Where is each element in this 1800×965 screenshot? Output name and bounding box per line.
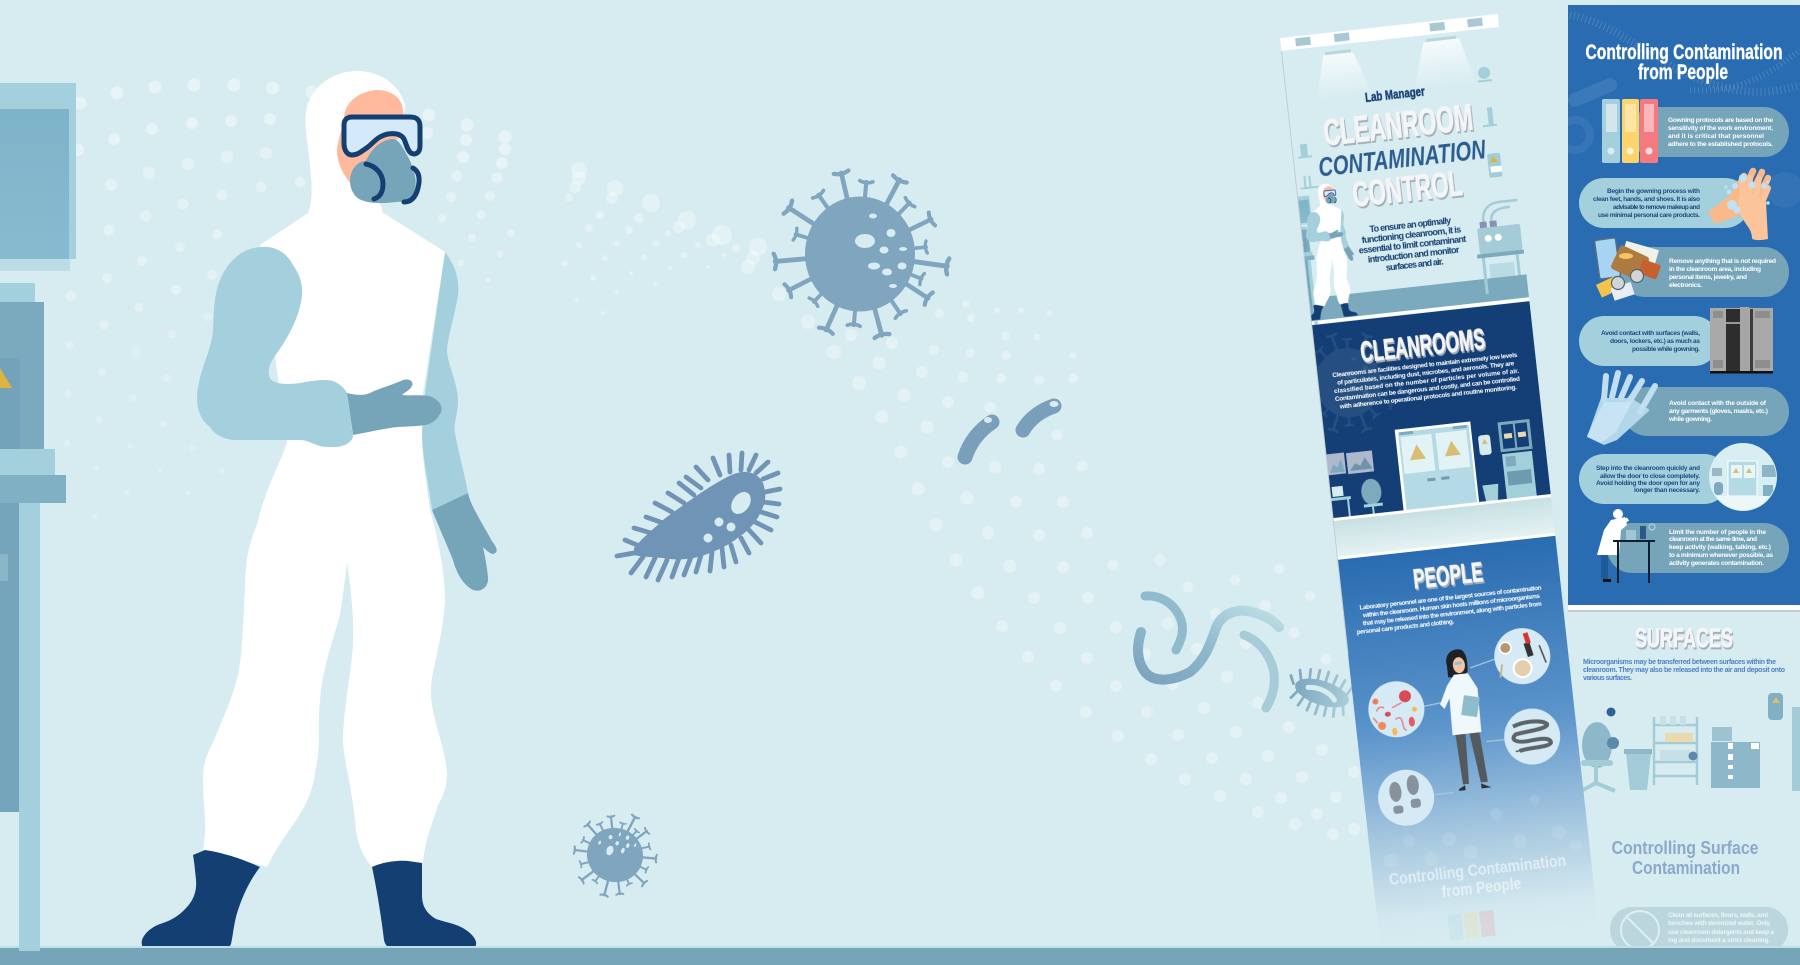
text block: with adherence to operational protocols and routine monitoring. (1338, 384, 1517, 411)
text block: within the cleanroom. Human skin hosts millions of microorganisms (1362, 593, 1541, 619)
step 3: remove personal items: Remove anything that is not required (1669, 258, 1776, 265)
faded binders (1448, 910, 1496, 940)
panel: controlling contamination from people (1560, 5, 1800, 605)
circle: shoe prints (1378, 770, 1434, 826)
step 7: limit people: activity generates contamination. (1669, 560, 1764, 567)
icon: small ciliate (1282, 661, 1355, 723)
heading: from People (1638, 61, 1728, 84)
suit body (203, 71, 447, 867)
mini lab bench (1477, 152, 1524, 294)
step 4: avoid surfaces (1579, 307, 1773, 374)
text block: that may be released into the environment, along with particles from (1362, 601, 1542, 627)
faded heading: Controlling Contamination (1388, 851, 1567, 889)
step 5: avoid garments: while gowning. (1668, 416, 1712, 423)
heading: PEOPLE (1411, 556, 1484, 595)
section: people (1338, 536, 1599, 952)
step 7: limit people: cleanroom at the same time, and (1669, 536, 1757, 543)
desk and chair (1331, 478, 1383, 516)
intro text: introduction and monitor (1367, 245, 1460, 265)
face (337, 90, 405, 188)
step 7: limit people: keep activity (walking, talking, etc.) (1669, 544, 1771, 551)
circle: makeup (1494, 628, 1550, 684)
goggles (344, 117, 420, 155)
panel: tilted infographic preview (1258, 14, 1599, 955)
step 7: limit people: Limit the number of people in the (1669, 529, 1766, 536)
faded virus motif (1316, 332, 1403, 433)
heading: controlling surface contamination: Controlling Surface (1612, 838, 1758, 858)
faded callout (1610, 907, 1788, 952)
text block (1583, 659, 1785, 682)
step 2: begin gowning: advisable to remove makeup and (1613, 204, 1700, 211)
wall charts (1326, 449, 1374, 476)
circle: skin germs (1368, 681, 1425, 738)
lab equipment at left edge (0, 83, 76, 951)
title: CONTAMINATION (1317, 134, 1487, 182)
step 7: limit people (1597, 509, 1789, 583)
step 6: step into the cleanroom: Avoid holding the door open for any (1596, 480, 1700, 487)
section: title header (1276, 14, 1530, 329)
step 5: avoid garments (1587, 373, 1789, 445)
left boot (142, 850, 260, 949)
right boot (372, 861, 476, 949)
floor (1309, 274, 1529, 322)
faded callout: log and document a strict cleaning. (1668, 937, 1770, 944)
faded callout: benches with deionized water. Only (1668, 920, 1770, 927)
scientist woman (1440, 649, 1492, 791)
far glove (432, 493, 497, 591)
text block: personal care products and clothing. (1356, 618, 1455, 636)
text block: of particulates, including dust, microbes, and aerosols. They are (1337, 360, 1515, 387)
ceiling lamps (1319, 36, 1470, 88)
icon: spiral bacteria (1138, 596, 1279, 708)
step 3: remove personal items: personal items, jewelry, and (1669, 274, 1747, 281)
section: floor band (1333, 494, 1555, 560)
step 3: remove personal items (1594, 238, 1789, 301)
icon: paramecium (617, 453, 780, 580)
faded heading: from People (1441, 874, 1522, 901)
step 6: step into the cleanroom: Step into the cleanroom quickly and (1596, 465, 1700, 472)
double doors (1395, 421, 1479, 513)
step 3: remove personal items: in the cleanroom area, including (1669, 266, 1761, 273)
heading: SURFACES (1635, 623, 1733, 653)
panel: surfaces (1568, 605, 1800, 952)
title (1319, 104, 1485, 209)
text block: various surfaces. (1583, 675, 1632, 682)
heading: controlling surface contamination: Contamination (1632, 858, 1740, 878)
connectors (1420, 659, 1510, 795)
text block: Laboratory personnel are one of the largest sources of contamination (1359, 585, 1542, 612)
step 3: remove personal items: electronics. (1669, 282, 1702, 289)
intro text: surfaces and air. (1385, 256, 1444, 273)
step 2: begin gowning: Begin the gowning process with (1607, 188, 1700, 195)
icon: washing hands (1708, 171, 1770, 240)
worker in white cleanroom suit (142, 71, 497, 949)
faded heading (1389, 856, 1566, 898)
section: cleanrooms (1312, 301, 1551, 518)
faded callout: use cleanroom detergents and keep a (1668, 929, 1774, 936)
text block: Contamination can be dangerous and costly, and can be controlled (1335, 376, 1520, 403)
intro text: essential to limit contaminant (1358, 234, 1467, 256)
icon: gloves (1587, 373, 1655, 445)
logo: Lab Manager (1364, 84, 1426, 105)
icon: phone, wallet and glasses (1594, 238, 1661, 301)
faded callout: Clean all surfaces, floors, walls, and (1668, 912, 1768, 919)
step 1: gowning protocols: Gowning protocols are based on the (1668, 117, 1773, 124)
text block: Cleanrooms are facilities designed to maintain extremely low levels (1332, 352, 1518, 379)
icon: cleanroom door (1709, 443, 1780, 512)
text block: cleanroom. They may also be released into the air and deposit onto (1583, 667, 1785, 674)
intro text: functioning cleanroom, it is (1361, 224, 1462, 245)
text block (1354, 585, 1545, 636)
title: CLEANROOM (1321, 96, 1475, 154)
intro text: To ensure an optimally (1369, 215, 1452, 234)
step 1: gowning protocols: adhere to the established protocols. (1668, 141, 1773, 148)
step 4: avoid surfaces: Avoid contact with surfaces (walls, (1601, 330, 1700, 337)
wall shelves (1290, 66, 1502, 190)
text block: classified based on the number of particles per volume of air. (1334, 368, 1520, 395)
intro text (1358, 217, 1466, 271)
step 6: step into the cleanroom: allow the door to close completely. (1600, 473, 1700, 480)
step 1: gowning protocols: sensitivity of the work environment, (1668, 125, 1773, 132)
mini equipment (1298, 195, 1318, 325)
circle: fabric fibers (1504, 708, 1560, 765)
step 6: step into the cleanroom (1579, 443, 1780, 512)
heading: controlling surface contamination (1612, 838, 1758, 878)
step 1: gowning protocols (1602, 99, 1789, 163)
step 2: begin gowning: use minimal personal care products. (1598, 212, 1700, 219)
icon: rod bacteria (965, 401, 1058, 457)
step 2: begin gowning (1579, 171, 1770, 240)
background dot stream between worker and germs (562, 162, 1377, 840)
text block: Microorganisms may be transferred between surfaces within the (1583, 659, 1776, 666)
faded bubbles (1403, 795, 1540, 842)
icon: lockers (1710, 307, 1773, 374)
heading: CLEANROOMS (1359, 323, 1487, 369)
text block (1332, 352, 1522, 411)
step 6: step into the cleanroom: longer than necessary. (1634, 487, 1700, 494)
step 5: avoid garments: any garments (gloves, masks, etc.) (1669, 408, 1768, 415)
step 7: limit people: to a minimum whenever possible, as (1669, 552, 1773, 559)
step 4: avoid surfaces: doors, lockers, etc.) as much as (1610, 338, 1700, 345)
step 5: avoid garments: Avoid contact with the outside of (1669, 400, 1767, 407)
step 4: avoid surfaces: possible while gowning. (1632, 346, 1700, 353)
icon: small virus (562, 800, 669, 909)
contaminated lab furniture (1581, 693, 1800, 791)
step 1: gowning protocols: and it is critical that personnel (1668, 133, 1764, 140)
floor strip (0, 940, 1800, 965)
background dot field around the worker (64, 78, 515, 520)
near arm (197, 247, 353, 447)
step 2: begin gowning: clean feet, hands, and shoes. It is also (1593, 196, 1700, 203)
respirator (362, 139, 416, 203)
title: CONTROL (1351, 164, 1464, 215)
mini worker (1306, 184, 1358, 321)
wall dispenser, cabinet, machine (1478, 419, 1537, 502)
heading (1586, 41, 1782, 84)
near glove (347, 379, 442, 435)
far arm (422, 252, 468, 510)
icon: large virus (774, 170, 949, 338)
icon: scientist at bench (1597, 509, 1655, 583)
